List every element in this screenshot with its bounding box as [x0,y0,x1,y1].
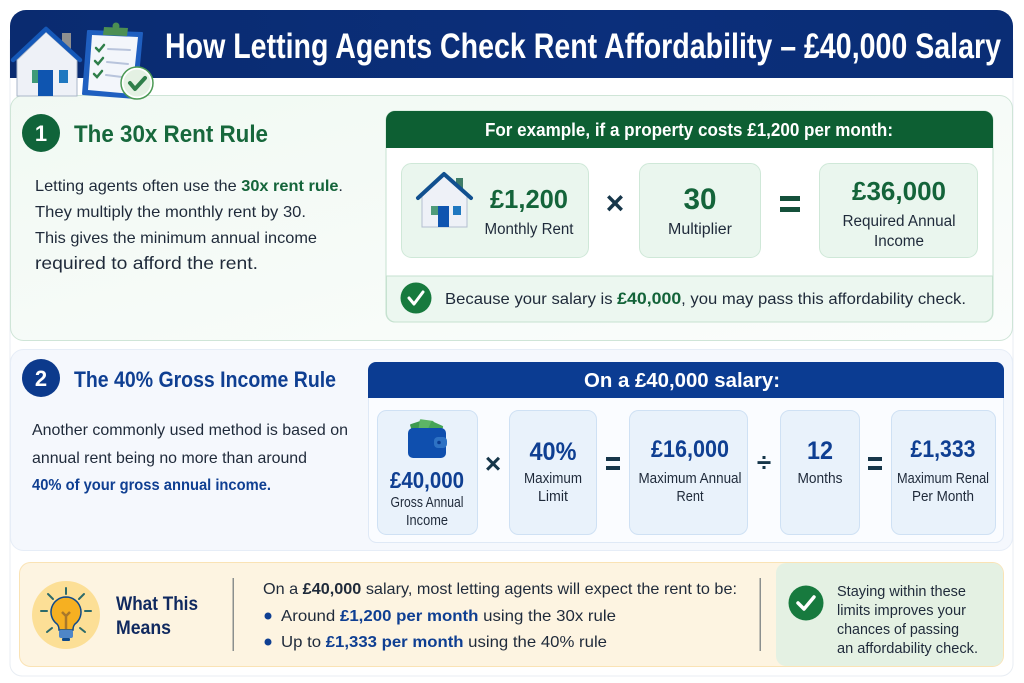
text block: 40% rule explanation: annual rent being no more than around [32,450,307,467]
operator: equals [868,457,882,470]
heading: the 40% gross income rule: The 40% Gross Income Rule [74,367,336,392]
box: maximum rental per month: £1,333 [910,436,976,463]
badge: number 2 [22,359,60,397]
text block: 30x rule explanation: required to afford the rent. [35,253,258,273]
icon: check [788,586,824,620]
text block: 40% rule explanation: Another commonly used method is based on [32,422,348,439]
callout: staying within limits: limits improves your [837,603,966,619]
text block: 30x rule explanation [35,178,343,273]
box: maximum annual rent: Maximum Annual [638,471,742,487]
box: maximum limit: 40% [530,438,576,466]
callout: staying within limits: chances of passing [837,622,959,638]
operator: multiply: × [606,185,624,221]
box: gross annual income: £40,000 [390,467,464,493]
box: monthly rent: Monthly Rent [484,221,574,238]
icon: wallet [408,419,447,458]
panel: what this means [20,562,1004,666]
panel: the 30x rent rule [10,96,1012,340]
text block: 40% rule explanation: 40% of your gross annual income. [32,477,271,494]
box: required annual income: £36,000 [852,176,946,206]
example card [386,111,993,322]
box: maximum annual rent: Rent [676,489,704,505]
icon: header house [13,29,80,96]
salary card [368,362,1004,542]
divider [232,578,234,651]
box: months: 12 [807,437,833,465]
example header [386,111,993,148]
salary header: On a £40,000 salary: [584,370,780,392]
callout: staying within limits: Staying within these [837,584,966,600]
box: multiplier [640,164,760,258]
icon: house [418,174,471,227]
box: months [780,410,860,534]
operator: divide: ÷ [757,447,771,477]
box: maximum rental per month: Maximum Renal [897,471,989,487]
box: maximum annual rent [630,410,748,534]
box: maximum annual rent: £16,000 [651,436,729,463]
text block: rent expectations [263,581,737,651]
header banner [10,10,1013,78]
example header: For example, if a property costs £1,200 per month: [485,119,893,140]
text block: 30x rule explanation: This gives the minimum annual income [35,230,317,247]
box: gross annual income: Income [406,513,448,529]
box: gross annual income: Gross Annual [390,495,464,511]
icon: check [400,282,432,314]
heading: what this means: What This [116,594,198,615]
callout: staying within limits: an affordability check. [837,641,978,657]
box: monthly rent: £1,200 [490,184,568,214]
heading: the 30x rent rule: The 30x Rent Rule [74,121,268,148]
text block: rent expectations: Up to £1,333 per month using the 40% rule [281,634,607,651]
box: multiplier: Multiplier [668,221,732,238]
salary header [368,362,1004,398]
badge: number 2: 2 [35,366,47,391]
icon: house and checklist [13,22,153,99]
heading: what this means [116,594,198,639]
callout: staying within limits [776,563,1003,666]
icon: check badge [121,67,153,99]
box: maximum limit: Maximum [524,471,582,487]
divider [760,578,761,651]
box: months: Months [798,471,842,487]
text block: 40% rule explanation [32,422,348,494]
panel: the 40% gross income rule [10,350,1012,550]
icon: clipboard [83,22,153,99]
box: gross annual income [378,410,478,534]
box: maximum limit [510,410,596,534]
box: maximum rental per month [892,410,996,534]
result strip: Because your salary is £40,000, you may pass this affordability check. [445,289,966,308]
box: multiplier: 30 [684,183,716,216]
text block: 30x rule explanation: Letting agents often use the 30x rent rule. [35,178,343,195]
text block: rent expectations: Around £1,200 per month using the 30x rule [281,608,616,625]
box: required annual income [820,164,978,258]
icon: light bulb [32,581,100,649]
box: monthly rent [402,164,588,258]
operator: equals [780,196,800,212]
badge: number 1: 1 [35,121,47,146]
box: maximum rental per month: Per Month [912,489,974,505]
box: required annual income: Income [874,233,924,250]
badge: number 1 [22,114,60,152]
box: maximum limit: Limit [538,489,568,505]
heading: what this means: Means [116,618,171,639]
operator: equals [606,457,620,470]
box: required annual income: Required Annual [842,213,956,230]
text block: 30x rule explanation: They multiply the monthly rent by 30. [35,204,306,221]
result strip [386,276,992,322]
text block: rent expectations: On a £40,000 salary, most letting agents will expect the rent to be: [263,581,737,598]
operator: multiply: × [485,448,501,479]
